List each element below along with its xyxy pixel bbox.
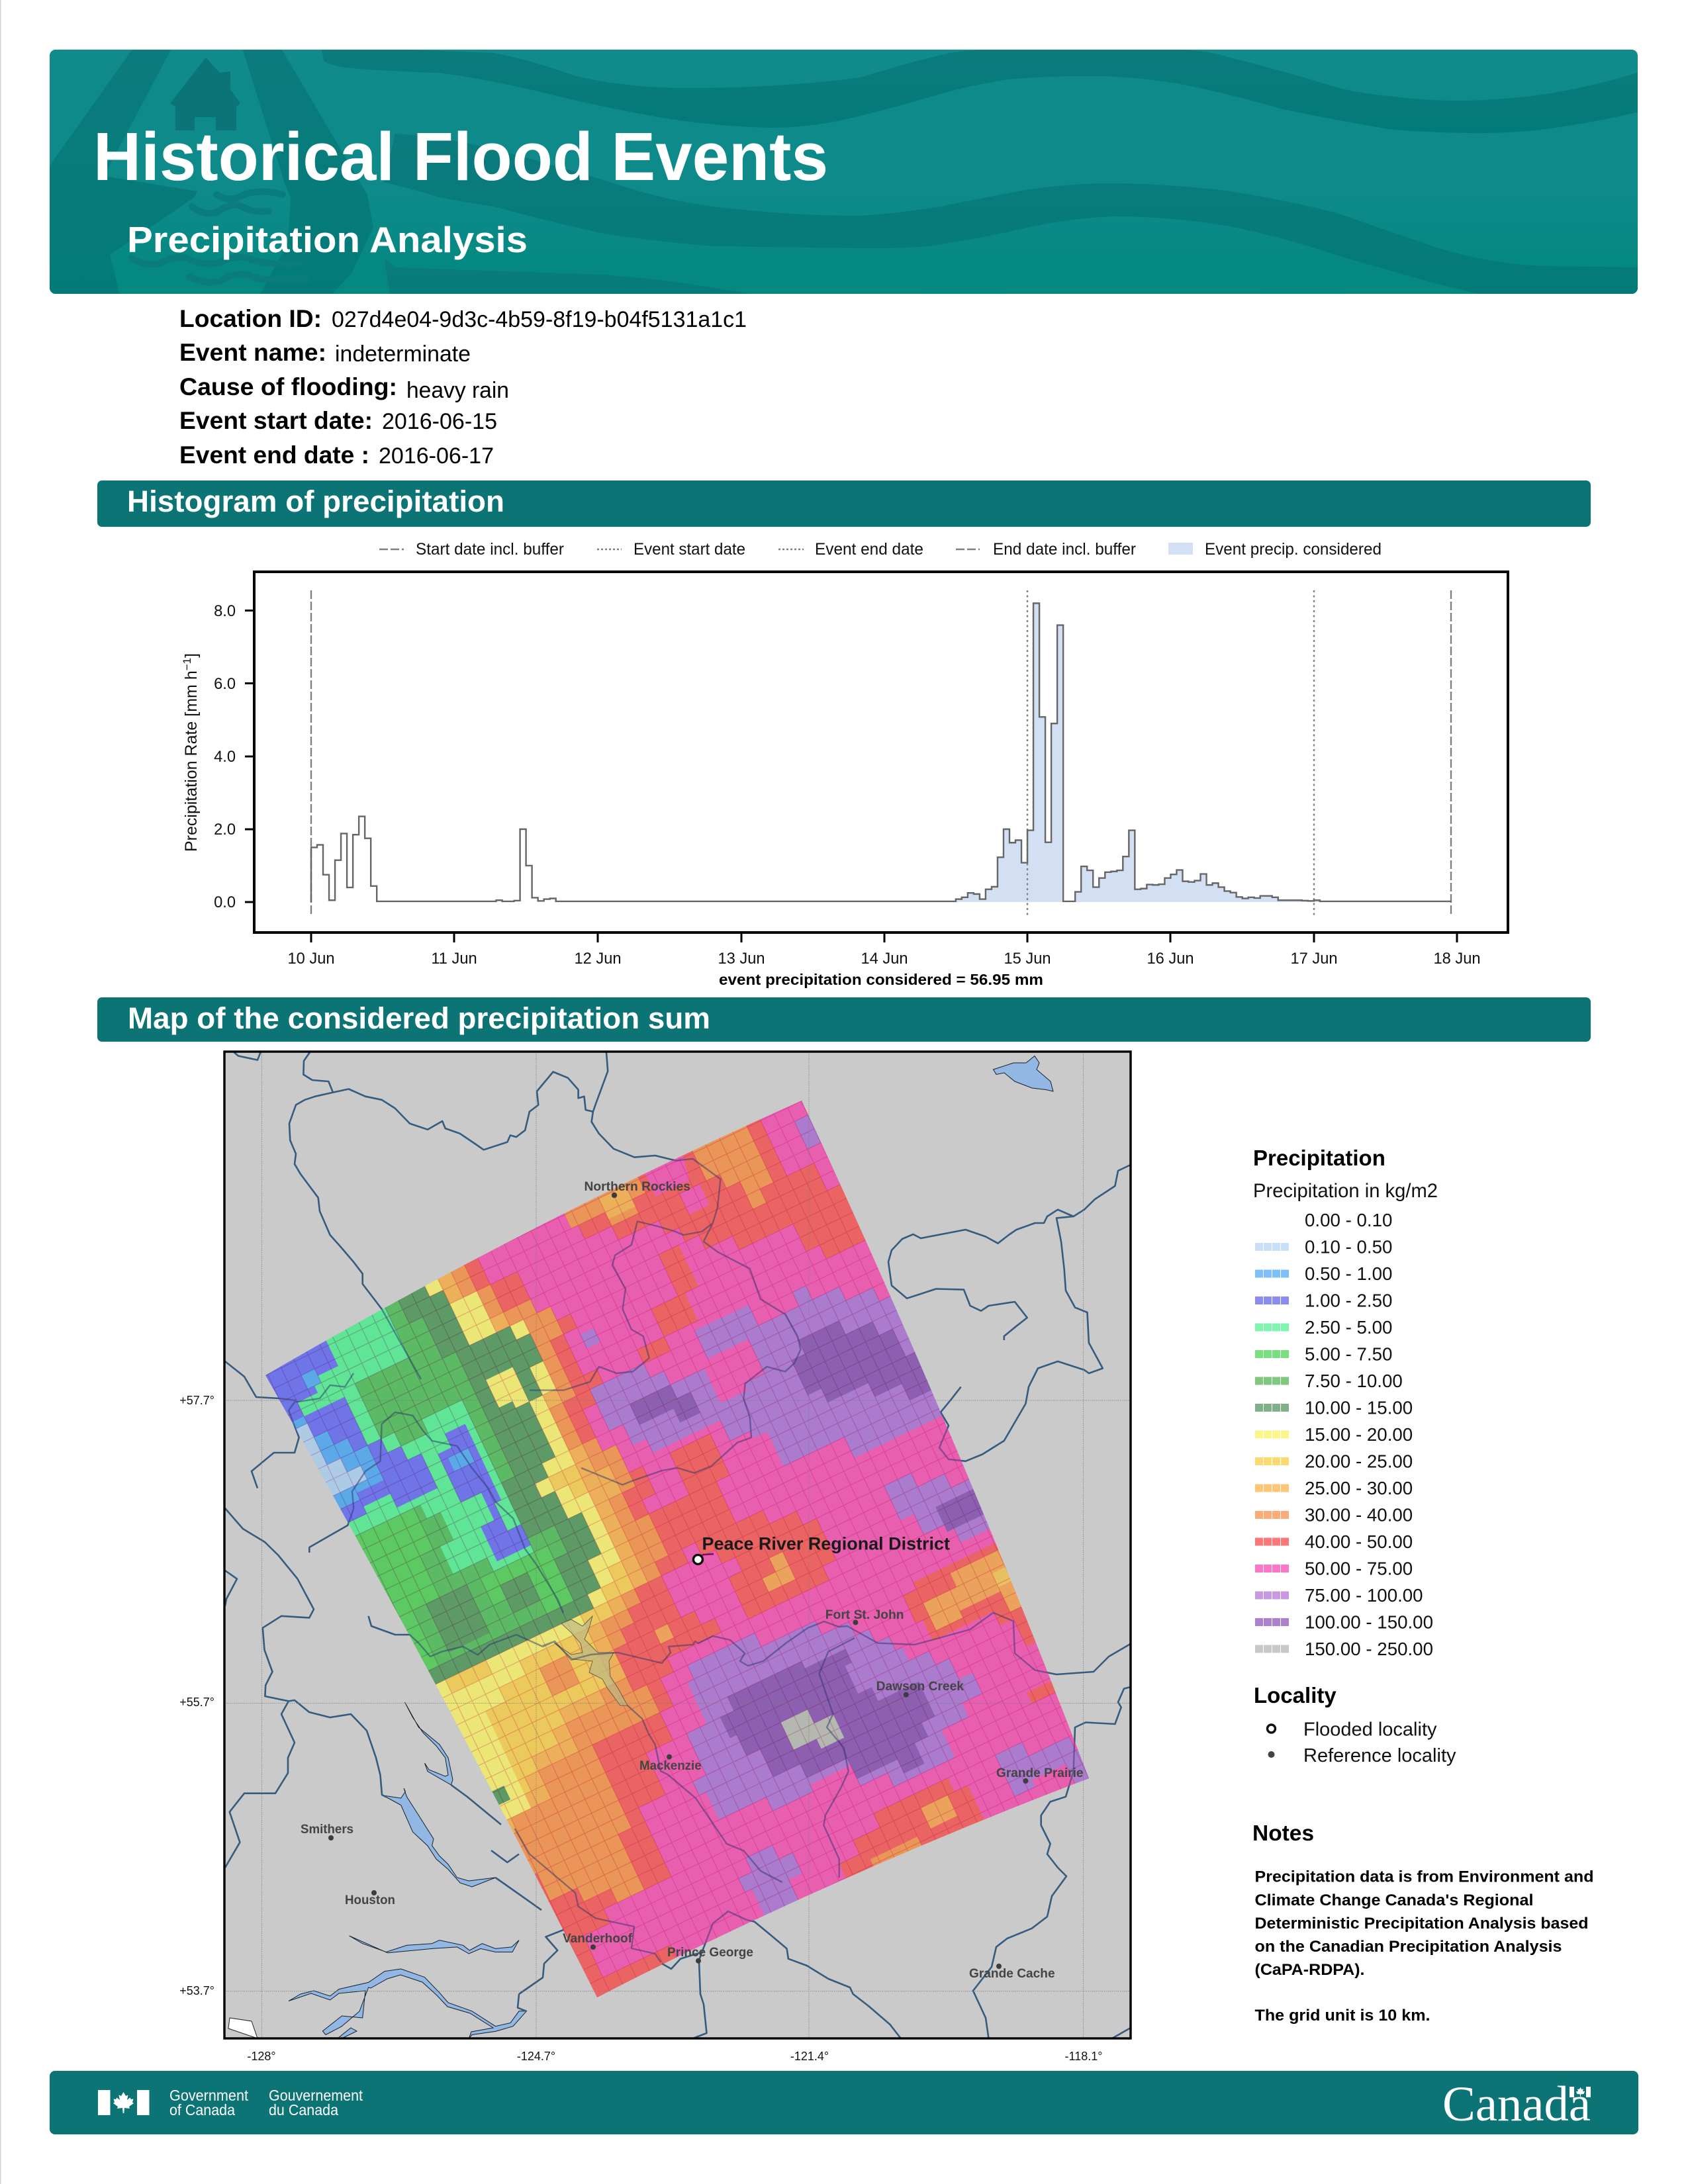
x axis date labels: 18 Jun bbox=[1433, 950, 1481, 968]
x axis date labels: 14 Jun bbox=[861, 950, 908, 968]
legend: locality: Flooded locality bbox=[1303, 1719, 1437, 1741]
x axis date labels: 12 Jun bbox=[574, 950, 622, 968]
label: Smithers: Smithers bbox=[301, 1823, 353, 1837]
y axis tick labels: 2.0 bbox=[214, 821, 236, 839]
longitude labels: -124.7° bbox=[517, 2050, 555, 2063]
notes: Climate Change Canada's Regional bbox=[1255, 1891, 1533, 1909]
y axis tick labels bbox=[214, 603, 236, 911]
chart legend: Event start date bbox=[633, 541, 745, 559]
icon: flood waves in logo bbox=[132, 191, 307, 282]
government wordmark french: Gouvernement bbox=[269, 2087, 363, 2104]
eastern purple patch bbox=[884, 1473, 990, 1543]
notes bbox=[1252, 1821, 1594, 2025]
heading: histogram of precipitation bbox=[97, 480, 1591, 527]
western band: 5-7.5 bbox=[279, 1463, 574, 1711]
western band: 7.5-10 bbox=[187, 1263, 587, 1711]
subtitle: Precipitation Analysis bbox=[127, 219, 528, 260]
x axis date labels: 16 Jun bbox=[1147, 950, 1194, 968]
title: Historical Flood Events bbox=[93, 118, 828, 195]
longitude labels: -121.4° bbox=[790, 2050, 829, 2063]
heading: map of the considered precipitation sum bbox=[97, 997, 1591, 1042]
event precipitation fill bbox=[956, 604, 1320, 902]
legend unit: Precipitation in kg/m2 bbox=[1253, 1181, 1438, 1202]
flooded locality marker bbox=[693, 1534, 950, 1564]
label: Grande Prairie: Grande Prairie bbox=[996, 1766, 1083, 1780]
latitude labels: +55.7° bbox=[179, 1696, 214, 1709]
western band: 0.5-1 bbox=[207, 1362, 387, 1545]
flooded locality symbol bbox=[1267, 1725, 1275, 1733]
y axis tick labels: 8.0 bbox=[214, 603, 236, 620]
footer: of Canada bbox=[169, 2101, 235, 2118]
legend rows: 25.00 - 30.00 bbox=[1305, 1478, 1413, 1498]
legend rows: 30.00 - 40.00 bbox=[1305, 1505, 1413, 1525]
canada wordmark: Canada bbox=[1442, 2077, 1591, 2132]
event information block: 2016-06-17 bbox=[379, 443, 494, 469]
legend: locality bbox=[1254, 1683, 1456, 1766]
longitude labels bbox=[247, 2050, 1102, 2063]
event information block bbox=[179, 305, 747, 469]
legend: locality: Reference locality bbox=[1303, 1745, 1456, 1766]
central red blob bbox=[649, 1433, 837, 1619]
label: Northern Rockies: Northern Rockies bbox=[584, 1180, 690, 1194]
latitude labels: +53.7° bbox=[179, 1984, 214, 1997]
western band: 0.1-0.5 bbox=[226, 1410, 367, 1531]
chart legend: Event precip. considered bbox=[1205, 541, 1382, 559]
reservoir seen through the grid bbox=[554, 1616, 628, 1706]
label: Prince George: Prince George bbox=[667, 1946, 753, 1960]
histogram chart bbox=[181, 541, 1508, 988]
legend rows: 15.00 - 20.00 bbox=[1305, 1424, 1413, 1445]
label: Grande Cache: Grande Cache bbox=[969, 1967, 1055, 1981]
map graticule bbox=[224, 1052, 1131, 2038]
precipitation map bbox=[179, 1048, 1210, 2085]
western band: 40-50 bbox=[465, 1257, 722, 1997]
map background bbox=[224, 1052, 1131, 2038]
label: Dawson Creek: Dawson Creek bbox=[876, 1680, 964, 1694]
notes: (CaPA-RDPA). bbox=[1255, 1961, 1365, 1979]
legend rows: 150.00 - 250.00 bbox=[1305, 1639, 1433, 1659]
event information block: Event start date: bbox=[179, 407, 373, 434]
footer: du Canada bbox=[269, 2101, 338, 2118]
legend rows: 50.00 - 75.00 bbox=[1305, 1558, 1413, 1579]
icon: house in flood logo bbox=[170, 58, 240, 130]
western band: 30-40 bbox=[187, 1224, 793, 1974]
blue channel bbox=[432, 1421, 531, 1565]
date reference lines bbox=[311, 590, 1451, 917]
legend rows: 75.00 - 100.00 bbox=[1305, 1585, 1423, 1606]
chart legend: Start date incl. buffer bbox=[416, 541, 564, 559]
notes: Deterministic Precipitation Analysis based bbox=[1255, 1915, 1589, 1933]
header banner bbox=[46, 46, 1642, 298]
longitude labels: -118.1° bbox=[1065, 2050, 1102, 2063]
event information block: Cause of flooding: bbox=[179, 373, 397, 400]
notes: The grid unit is 10 km. bbox=[1255, 2007, 1430, 2025]
notes: Notes bbox=[1252, 1821, 1314, 1846]
purple north corner bbox=[580, 1115, 821, 1349]
legend rows: 5.00 - 7.50 bbox=[1305, 1343, 1392, 1365]
western band: 25-30 bbox=[187, 1230, 733, 1877]
event information block: Location ID: bbox=[179, 305, 322, 332]
legend: precipitation bbox=[1253, 1146, 1438, 1659]
legend heading: Precipitation bbox=[1253, 1146, 1385, 1170]
event information block: Event name: bbox=[179, 339, 326, 366]
western band: 15-20 bbox=[187, 1236, 714, 1864]
x axis date labels: 11 Jun bbox=[431, 950, 477, 968]
government wordmark english: Government bbox=[169, 2087, 249, 2104]
latitude labels bbox=[179, 1394, 214, 1997]
legend rows bbox=[1255, 1210, 1433, 1659]
legend rows: 2.50 - 5.00 bbox=[1305, 1317, 1392, 1338]
latitude labels: +57.7° bbox=[179, 1394, 214, 1407]
label: Vanderhoof: Vanderhoof bbox=[563, 1932, 633, 1946]
rivers bbox=[225, 1052, 1131, 2038]
event information block: Event end date : bbox=[179, 441, 369, 469]
western band: 1-2.5 bbox=[187, 1318, 352, 1455]
notes: Precipitation data is from Environment and bbox=[1255, 1868, 1594, 1886]
legend rows: 0.50 - 1.00 bbox=[1305, 1263, 1392, 1284]
y axis title: −1 bbox=[181, 658, 193, 670]
event information block: heavy rain bbox=[406, 378, 509, 403]
legend rows: 100.00 - 150.00 bbox=[1305, 1612, 1433, 1632]
small southern purple bbox=[739, 1845, 802, 1915]
label: Houston: Houston bbox=[345, 1893, 395, 1907]
legend rows: 20.00 - 25.00 bbox=[1305, 1451, 1413, 1472]
map frame bbox=[224, 1052, 1131, 2038]
legend rows: 0.10 - 0.50 bbox=[1305, 1236, 1392, 1257]
western band: 2.5-5 bbox=[187, 1275, 534, 1656]
event precipitation total: event precipitation considered = 56.95 mm bbox=[719, 971, 1043, 988]
heading: map of the considered precipitation sum: Map of the considered precipitation sum bbox=[128, 1001, 710, 1035]
y axis tick labels: 0.0 bbox=[214, 894, 236, 911]
x axis date labels: 13 Jun bbox=[718, 950, 765, 968]
central purple band bbox=[590, 1285, 943, 1467]
longitude labels: -128° bbox=[247, 2050, 276, 2063]
notes: on the Canadian Precipitation Analysis bbox=[1255, 1938, 1562, 1956]
flooded locality marker: Peace River Regional District bbox=[702, 1534, 950, 1554]
icon: government of canada flag bbox=[98, 2090, 150, 2115]
western band: 10-15 bbox=[187, 1236, 648, 1725]
legend rows: 0.00 - 0.10 bbox=[1305, 1210, 1392, 1230]
reference locality symbol bbox=[1268, 1751, 1275, 1758]
grande prairie purple bbox=[995, 1737, 1089, 1797]
chart legend: Event end date bbox=[815, 541, 923, 559]
event information block: 027d4e04-9d3c-4b59-8f19-b04f5131a1c1 bbox=[332, 307, 747, 332]
legend rows: 1.00 - 2.50 bbox=[1305, 1291, 1392, 1310]
icon: canada wordmark flag bbox=[1570, 2087, 1591, 2097]
north red area bbox=[564, 1120, 866, 1259]
heading: histogram of precipitation: Histogram of precipitation bbox=[127, 484, 504, 518]
y axis tick labels: 6.0 bbox=[214, 676, 236, 693]
rivers seen through the grid bbox=[225, 1052, 1131, 2038]
chart axes frame and ticks bbox=[245, 572, 1508, 942]
precipitation step line bbox=[311, 604, 1451, 902]
y axis title: ] bbox=[182, 653, 201, 658]
x axis date labels: 17 Jun bbox=[1290, 950, 1338, 968]
y axis tick labels: 4.0 bbox=[214, 749, 236, 766]
label: Mackenzie: Mackenzie bbox=[639, 1759, 702, 1773]
western band: 20-25 bbox=[187, 1243, 700, 1864]
southern purple area bbox=[686, 1621, 982, 1820]
south east red and orange blobs bbox=[839, 1778, 984, 1878]
x axis date labels bbox=[287, 950, 1481, 968]
x axis date labels: 10 Jun bbox=[287, 950, 335, 968]
legend rows: 10.00 - 15.00 bbox=[1305, 1398, 1413, 1418]
label: Fort St. John: Fort St. John bbox=[825, 1608, 904, 1622]
x axis date labels: 15 Jun bbox=[1004, 950, 1051, 968]
grid lines bbox=[187, 1048, 1210, 2085]
chart legend: End date incl. buffer bbox=[993, 541, 1136, 559]
footer bbox=[50, 2071, 1638, 2134]
lakes and coastline bbox=[228, 1056, 1053, 2038]
legend: locality: Locality bbox=[1254, 1683, 1336, 1707]
legend rows: 7.50 - 10.00 bbox=[1305, 1371, 1403, 1391]
legend rows: 40.00 - 50.00 bbox=[1305, 1531, 1413, 1552]
precipitation grid bbox=[265, 1101, 1089, 1997]
locality dots bbox=[328, 1193, 1028, 1969]
y axis title: Precipitation Rate [mm h bbox=[182, 670, 201, 852]
event information block: indeterminate bbox=[335, 341, 471, 367]
chart legend bbox=[379, 541, 1382, 559]
map labels bbox=[301, 1180, 1083, 1981]
event information block: 2016-06-15 bbox=[382, 409, 497, 434]
